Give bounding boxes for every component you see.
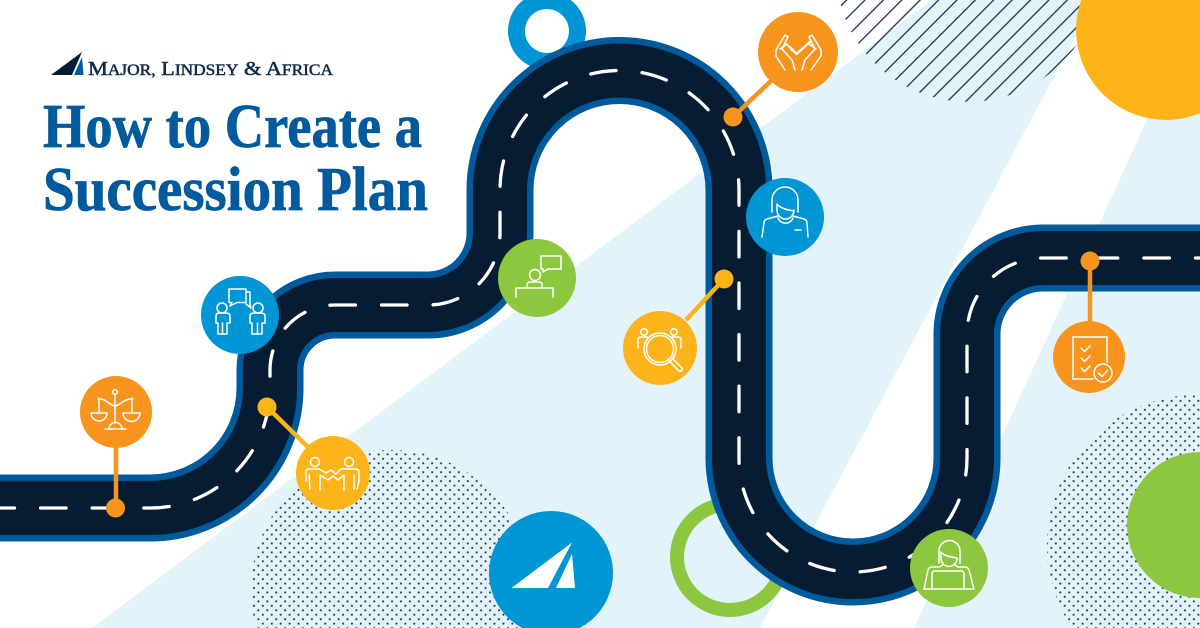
hatched circle	[840, 0, 1096, 102]
title: How to Create a	[43, 93, 422, 161]
stop: two people talking	[201, 276, 279, 354]
dotted circle right	[1047, 395, 1200, 628]
stop: talent search magnifier	[623, 270, 734, 385]
stop: ethics scale	[80, 376, 152, 518]
stop: person at desk with speech bubble	[498, 239, 576, 317]
logo	[51, 52, 334, 80]
title	[43, 93, 428, 224]
stop: caring hands with check	[724, 12, 838, 126]
green circle right	[1127, 452, 1200, 598]
title: Succession Plan	[43, 156, 428, 224]
brand badge with sail mark	[489, 511, 613, 628]
winding road	[0, 70, 1200, 572]
dotted circle left	[251, 450, 531, 628]
stop: woman at laptop	[910, 529, 988, 607]
green ring bottom	[677, 504, 783, 610]
blue ring top	[508, 0, 586, 70]
stop: professional woman	[746, 178, 824, 256]
logo: MAJOR, LINDSEY & A FRICA	[88, 58, 334, 80]
stop: handshake	[258, 398, 370, 510]
light blue right area	[914, 4, 1200, 628]
yellow circle top right	[1076, 0, 1200, 120]
stop: checklist	[1053, 252, 1125, 393]
